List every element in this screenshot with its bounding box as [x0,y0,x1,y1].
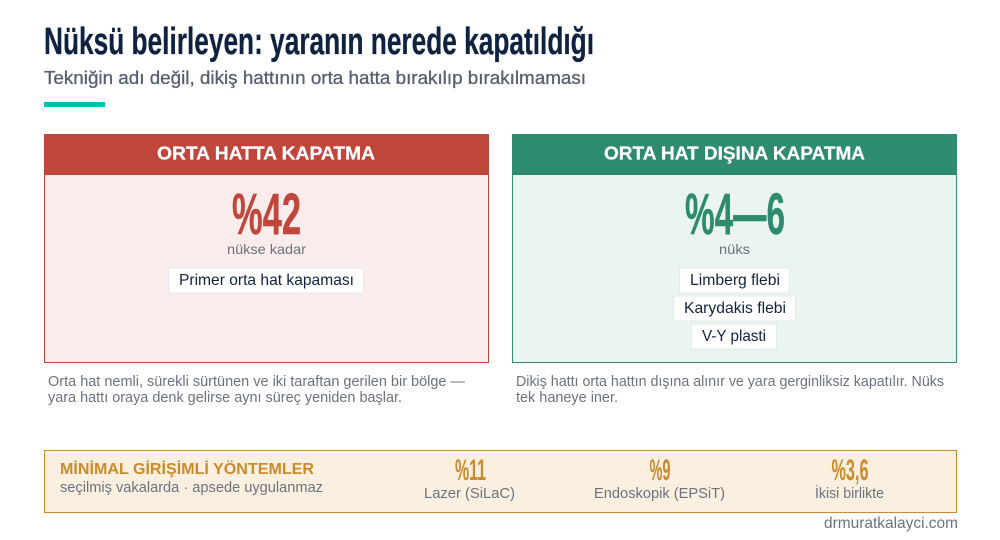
stat: both [815,454,884,502]
tag: Karydakis flebi [684,300,786,317]
description right: tek haneye iner. [516,390,618,406]
panel heading: ORTA HAT DIŞINA KAPATMA [604,144,865,164]
tag: V-Y plasti [702,328,766,345]
panel: orta hat dışına kapatma [512,134,957,362]
accent bar [44,102,105,107]
band subheading: seçilmiş vakalarda · apsede uygulanmaz [60,480,323,496]
source credit: drmuratkalayci.com [824,515,958,532]
tag [680,268,790,293]
stat: endoscopic: Endoskopik (EPSiT) [594,486,725,502]
description right: Dikiş hattı orta hattın dışına alınır ve yara gerginliksiz kapatılır. Nüks [516,374,944,390]
band heading: MİNİMAL GİRİŞİMLİ YÖNTEMLER [60,459,314,478]
stat: laser: %11 [455,454,486,487]
stat: laser [424,454,515,502]
panel: minimal methods [44,450,956,512]
stat: both: İkisi birlikte [815,484,884,502]
description left: yara hattı oraya denk gelirse aynı süreç yeniden başlar. [48,390,402,406]
stat: endoscopic: %9 [650,454,670,487]
stat label: nüks [719,241,750,257]
tag [674,296,796,321]
subtitle: Tekniğin adı değil, dikiş hattının orta hatta bırakılıp bırakılmaması [44,68,586,88]
description left: Orta hat nemli, sürekli sürtünen ve iki taraftan gerilen bir bölge — [48,374,466,390]
tag: Primer orta hat kapaması [179,272,354,289]
stat: both: %3,6 [832,454,868,487]
title: Nüksü belirleyen: yaranın nerede kapatıldığı [44,21,594,63]
tag [692,324,776,349]
panel header [44,134,489,175]
stat: endoscopic [594,454,725,502]
stat: laser: Lazer (SiLaC) [424,486,515,502]
big stat: %42 [232,182,301,247]
big stat: %4—6 [685,182,785,247]
panel header [512,134,957,175]
stat label: nükse kadar [227,241,306,257]
panel: orta hatta kapatma [44,134,489,362]
tag [168,268,364,293]
panel heading: ORTA HATTA KAPATMA [157,144,375,164]
tag: Limberg flebi [690,272,780,289]
